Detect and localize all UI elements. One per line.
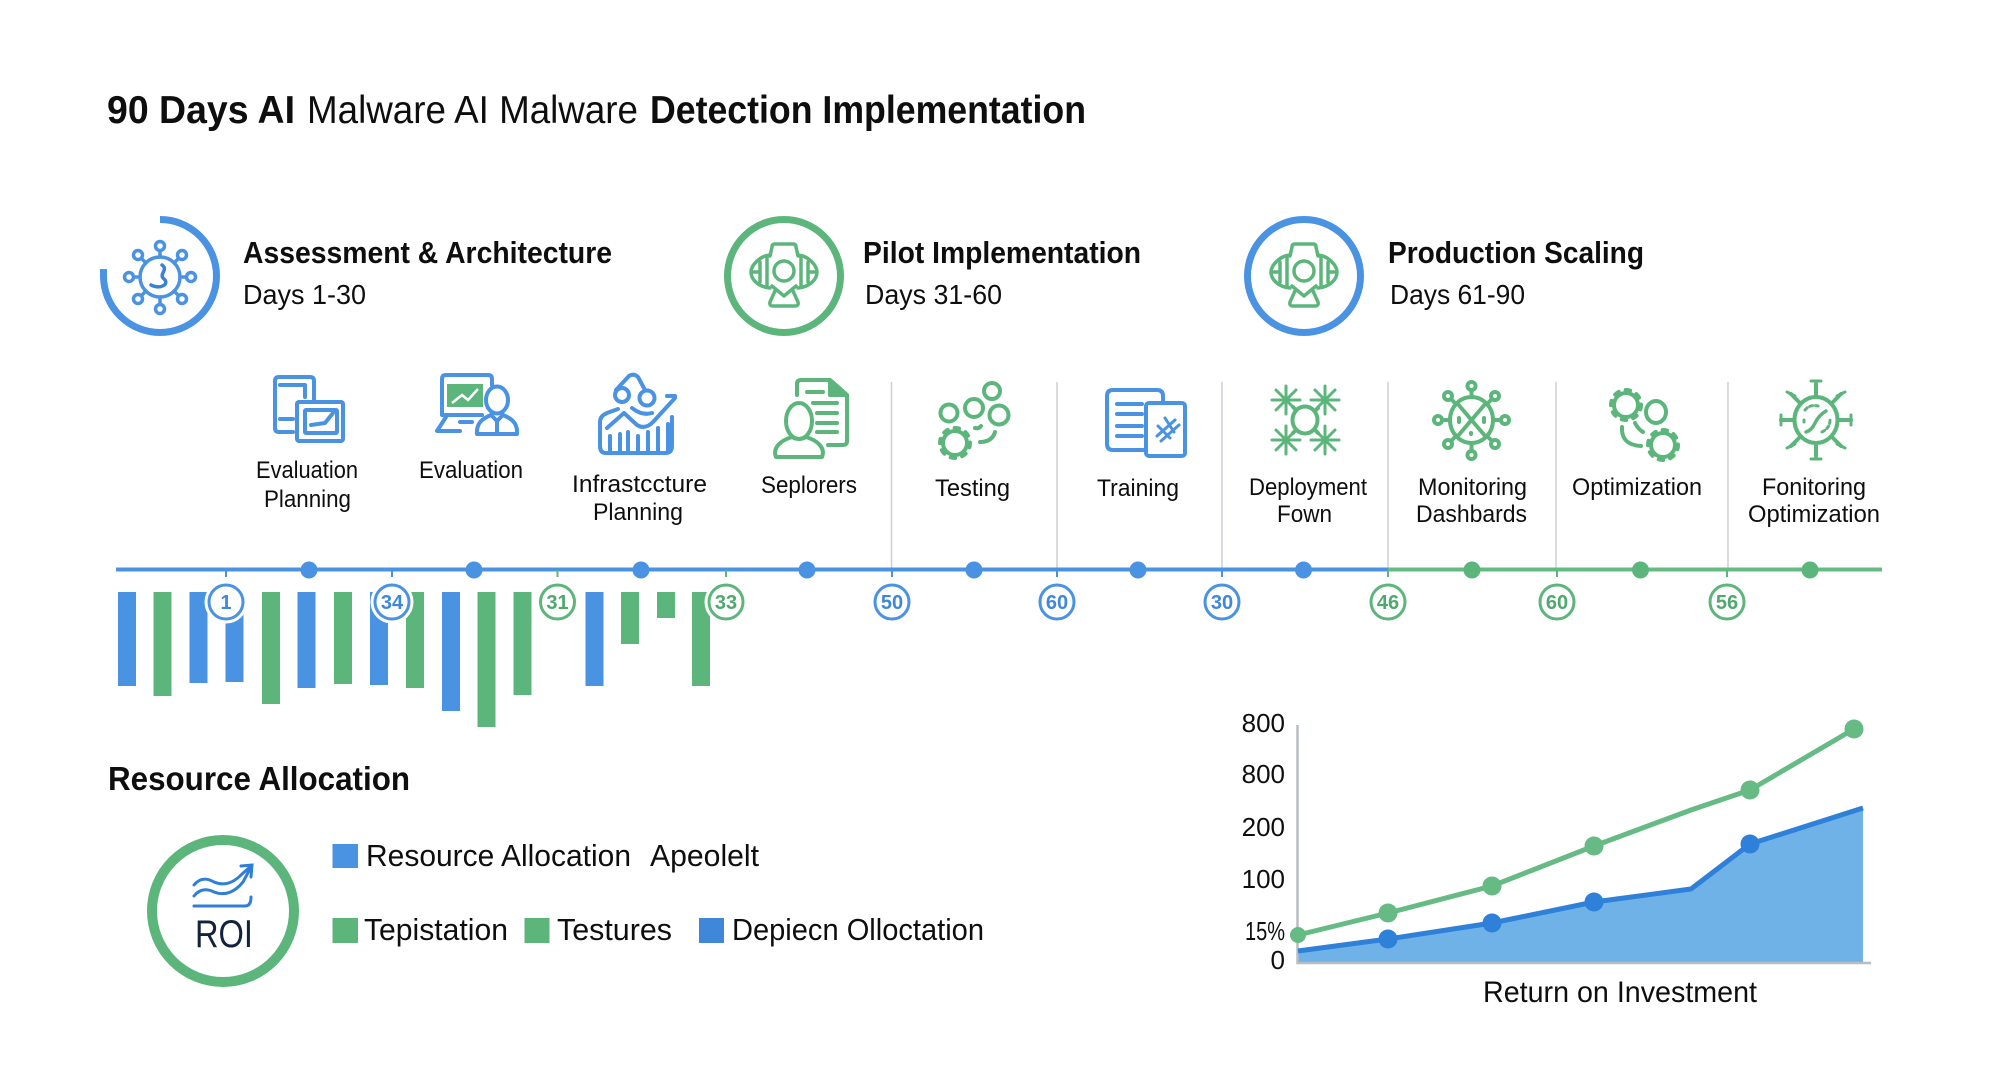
phase 1 heading: Assessment & Architecture (243, 235, 612, 270)
day number badges: 46 (1377, 592, 1399, 614)
day number badges: 30 (1211, 592, 1233, 614)
phase 2 dates: Days 31-60 (865, 279, 1002, 310)
bar chart: day-by-day resource bars (118, 592, 710, 727)
icon: documents (1107, 390, 1185, 456)
timeline nodes (300, 562, 1818, 578)
label: Evaluation (256, 457, 358, 484)
day number badges: 50 (881, 592, 903, 614)
label: Fonitoring (1762, 474, 1866, 501)
title: Detection Implementation (650, 89, 1086, 132)
icon: gears (1611, 390, 1678, 460)
milestone: evaluation planning (256, 377, 358, 513)
panel: phase 2 header (728, 220, 1141, 332)
day number badges: 60 (1046, 592, 1068, 614)
label: Testing (935, 475, 1010, 502)
phase 3 dates: Days 61-90 (1390, 279, 1525, 310)
icon: ROI badge (152, 840, 294, 982)
green line series (1290, 720, 1864, 943)
icon: crossed virus (1434, 382, 1509, 459)
timeline (116, 562, 1882, 622)
y axis labels: 800 (1242, 759, 1285, 789)
icon: person with document (775, 380, 847, 457)
milestone: training (1097, 390, 1185, 502)
label: Infrastccture (572, 471, 707, 498)
label (1249, 474, 1367, 528)
area series (1298, 808, 1863, 963)
label: Training (1097, 475, 1179, 502)
label: Deployment (1249, 474, 1367, 501)
label (256, 457, 358, 513)
axes (1298, 725, 1871, 963)
icon: tablet and chart card (275, 377, 343, 441)
day number badges: 33 (715, 592, 737, 614)
legend: Testures (557, 912, 672, 947)
label: Seplorers (761, 472, 857, 499)
label: Optimization (1748, 501, 1880, 528)
label: Optimization (1572, 474, 1702, 501)
panel: phase 1 header (104, 220, 612, 332)
label (572, 471, 707, 526)
label (1748, 474, 1880, 528)
phase 3 heading: Production Scaling (1388, 235, 1644, 270)
title: Malware AI Malware (307, 89, 638, 132)
icon: virus with strand (1781, 381, 1851, 459)
y axis labels (1242, 708, 1285, 975)
title (107, 89, 1086, 132)
icon: cells and gear (940, 383, 1008, 458)
day number badges: 60 (1546, 592, 1568, 614)
milestone: deployment (1249, 386, 1367, 528)
day number badges: 56 (1716, 592, 1738, 614)
legend (332, 838, 984, 947)
milestone: fonitoring optimization (1748, 381, 1880, 528)
heading: resource allocation: Resource Allocation (108, 760, 410, 797)
icon: house and growth chart (600, 375, 675, 453)
y axis labels: 100 (1242, 864, 1285, 894)
phase 1 dates: Days 1-30 (243, 279, 366, 310)
y axis labels: 800 (1242, 708, 1285, 738)
label: Dashbards (1416, 501, 1527, 528)
icon: hub with four snowflakes (1272, 386, 1339, 454)
panel: phase 3 header (1248, 220, 1644, 332)
label (1416, 474, 1527, 528)
title: 90 Days AI (107, 89, 295, 132)
day number badges (206, 582, 1744, 622)
phase 2 heading: Pilot Implementation (863, 235, 1141, 270)
milestone: optimization (1572, 390, 1702, 501)
y axis labels: 15% (1245, 916, 1285, 946)
y axis labels: 0 (1271, 945, 1285, 975)
blue line series (1298, 808, 1863, 951)
milestone: testing (935, 383, 1010, 502)
x axis title: Return on Investment (1483, 976, 1758, 1009)
day number badges: 1 (220, 592, 232, 614)
milestone: seplorers (761, 380, 857, 499)
label: Monitoring (1418, 474, 1527, 501)
legend: Depiecn Olloctation (732, 912, 984, 947)
icon: ROI badge: ROI (195, 913, 253, 956)
icon: monitor and person (437, 375, 517, 434)
icon: green ring with chip (728, 220, 840, 332)
legend: Tepistation (364, 912, 508, 947)
timeline rail (116, 570, 1882, 577)
y axis labels: 200 (1242, 812, 1285, 842)
icon: blue ring with chip (1248, 220, 1360, 332)
label: Evaluation (419, 457, 523, 484)
legend: Resource Allocation (366, 838, 631, 873)
day number badges: 34 (381, 592, 404, 614)
chart: return on investment (1242, 708, 1871, 1009)
label: Fown (1277, 501, 1332, 528)
milestone: infrastructure planning (572, 375, 707, 526)
milestone: monitoring dashboards (1416, 382, 1527, 528)
label: Planning (264, 486, 351, 513)
milestone: evaluation (419, 375, 523, 484)
legend: Apeolelt (650, 838, 759, 873)
label: Planning (593, 499, 683, 526)
icon: virus in open blue ring (104, 220, 216, 332)
day number badges: 31 (546, 592, 569, 614)
